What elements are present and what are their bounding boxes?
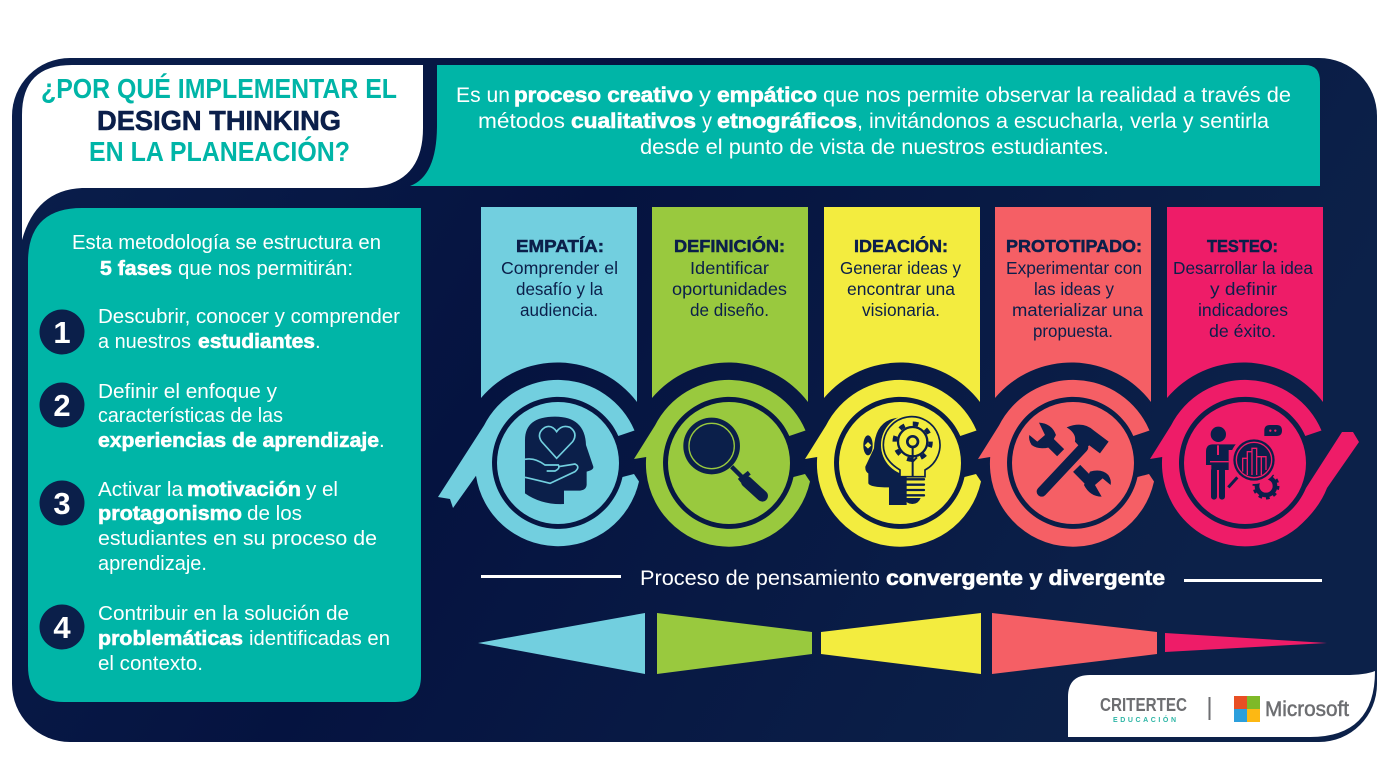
item 3: estudiantes en su proceso de (98, 527, 377, 550)
item 2 (40, 380, 385, 452)
panel: five phases list: Esta metodología se estructura en (72, 231, 381, 254)
circular arrow: definición (634, 380, 810, 547)
item 3: 3 (53, 486, 71, 521)
banner: ideación: IDEACIÓN: (854, 235, 948, 256)
intro panel: métodos (478, 109, 565, 133)
banner: prototipado: propuesta. (1033, 321, 1113, 341)
intro panel: y (702, 109, 712, 133)
intro panel: y (699, 83, 711, 107)
item 4: Contribuir en la solución de (98, 602, 349, 625)
banner: testeo: indicadores (1198, 300, 1288, 320)
item 4: el contexto. (98, 652, 203, 675)
banner: prototipado: Experimentar con (1006, 258, 1142, 278)
logo: Microsoft (1234, 696, 1349, 722)
item 4: 4 (53, 610, 71, 645)
icon: hammer and wrenches (1029, 423, 1111, 497)
banner: testeo: y definir (1210, 279, 1277, 299)
item 1: Descubrir, conocer y comprender (98, 305, 400, 328)
caption: convergent and divergent process (481, 567, 1322, 590)
logo: Criertec: CRITERTEC (1100, 695, 1187, 715)
intro panel: que nos permite observar la realidad a través de (823, 83, 1291, 107)
item 1: estudiantes (198, 330, 315, 353)
logo: Microsoft: Microsoft (1265, 698, 1349, 721)
intro panel: proceso creativo (514, 83, 693, 107)
banner: definición: de diseño. (690, 300, 769, 320)
intro panel (410, 65, 1320, 186)
item 2: . (379, 429, 385, 452)
item 3: aprendizaje. (98, 552, 207, 575)
caption: convergent and divergent process: Proceso de pensamiento (640, 567, 880, 590)
icon: head with light bulb and gear (863, 414, 942, 505)
panel: five phases list: que nos permitirán: (178, 257, 353, 280)
circular arrow: empatía (438, 380, 639, 546)
intro panel: Es un (456, 83, 510, 107)
banner: testeo: Desarrollar la idea (1173, 258, 1313, 278)
item 1: a nuestros (98, 330, 191, 353)
icon: analyst with magnifier and chart (1206, 425, 1282, 498)
item 2: Definir el enfoque y (98, 380, 278, 403)
banner: definición (652, 207, 808, 402)
banner: definición: Identificar (690, 258, 769, 278)
banner: prototipado: PROTOTIPADO: (1006, 236, 1142, 256)
item 3 (40, 478, 377, 575)
panel: five phases list (28, 208, 421, 702)
circular arrow: ideación (805, 380, 981, 547)
item 2: experiencias de aprendizaje (98, 429, 379, 452)
item 1: . (315, 330, 321, 353)
item 4 (40, 602, 390, 675)
title panel (22, 65, 423, 240)
intro panel: , invitándonos a escucharla, verla y sentirla (857, 109, 1269, 133)
chart: converging and diverging wedges (478, 613, 1327, 674)
item 3: y el (306, 478, 338, 501)
item 4: identificadas en (249, 627, 390, 650)
title panel: EN LA PLANEACIÓN? (89, 136, 350, 167)
item 3: protagonismo (98, 502, 242, 525)
banner: ideación: visionaria. (862, 300, 940, 320)
banner: empatía: EMPATÍA: (516, 235, 604, 256)
banner: testeo: TESTEO: (1207, 236, 1278, 256)
item 3: Activar la (98, 478, 184, 501)
banner: testeo: de éxito. (1209, 321, 1276, 341)
banner: empatía: desafío y la (516, 279, 603, 299)
item 3: de los (247, 502, 302, 525)
item 1: 1 (53, 315, 71, 350)
banner: definición: DEFINICIÓN: (674, 235, 785, 256)
title panel: DESIGN THINKING (97, 105, 341, 136)
intro panel: desde el punto de vista de nuestros estudiantes. (640, 135, 1109, 159)
circular arrow: prototipado (978, 380, 1154, 547)
banner: ideación: encontrar una (847, 279, 955, 299)
banner: empatía: audiencia. (520, 300, 598, 320)
icon: magnifying glass (683, 418, 762, 496)
title panel: ¿POR QUÉ IMPLEMENTAR EL (41, 73, 397, 104)
banner: ideación: Generar ideas y (840, 258, 961, 278)
item 1 (40, 305, 400, 354)
banner: empatía: Comprender el (501, 258, 618, 278)
intro panel: cualitativos (571, 109, 696, 133)
item 2: características de las (98, 404, 283, 427)
banner: ideación (824, 207, 980, 402)
panel: five phases list: 5 fases (100, 257, 172, 280)
intro panel: etnográficos (717, 109, 857, 133)
banner: testeo (1167, 207, 1323, 402)
banner: prototipado: las ideas y (1034, 279, 1114, 299)
item 3: motivación (187, 478, 301, 501)
item 2: 2 (53, 388, 71, 423)
circular arrow: testeo (1150, 380, 1359, 546)
logo: Criertec: EDUCACIÓN (1113, 715, 1176, 724)
logo: Criertec (1100, 695, 1187, 724)
caption: convergent and divergent process: convergente y divergente (886, 567, 1165, 590)
item 4: problemáticas (98, 627, 243, 650)
banner: empatía (481, 207, 637, 402)
icon: head with heart and hand (525, 417, 593, 504)
intro panel: empático (717, 83, 817, 107)
banner: prototipado: materializar una (1012, 300, 1143, 320)
banner: prototipado (995, 207, 1151, 402)
banner: definición: oportunidades (672, 279, 787, 299)
panel: logos (1068, 671, 1375, 737)
